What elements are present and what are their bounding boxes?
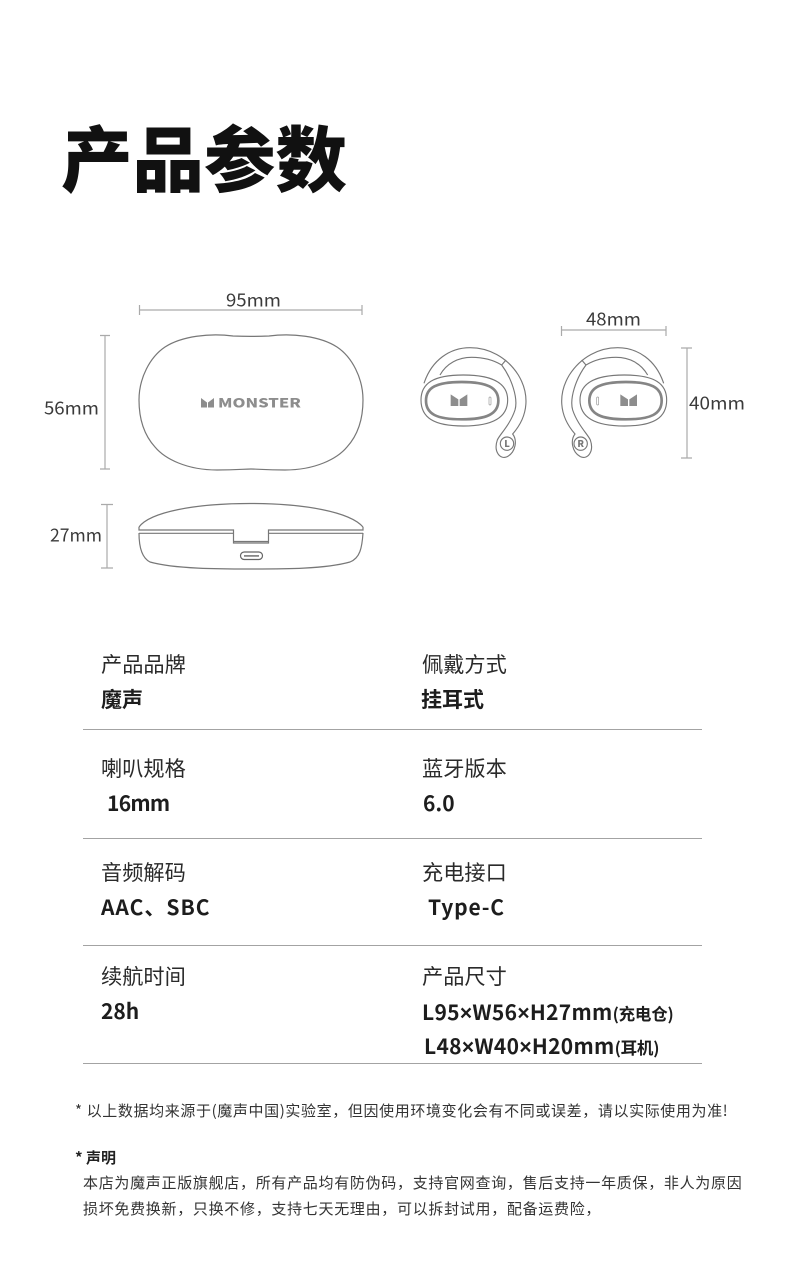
logo mark xyxy=(451,394,467,406)
earbud: right xyxy=(562,348,667,457)
case side view xyxy=(139,504,363,569)
dimension: 95mm: 95mm xyxy=(226,288,281,312)
spec: driver label: 喇叭规格 xyxy=(101,752,186,783)
spec: wearing label: 佩戴方式 xyxy=(422,648,507,679)
logo icon xyxy=(201,398,214,408)
logo wordmark: MONSTER xyxy=(218,392,301,412)
footnote: statement body xyxy=(83,1172,742,1219)
dimension diagrams xyxy=(44,288,745,570)
dimension: 40mm xyxy=(681,348,745,458)
dimension: 56mm xyxy=(44,336,110,469)
spec: codec label: 音频解码 xyxy=(101,856,186,887)
spec: battery value: 28h xyxy=(101,996,139,1026)
spec: wearing value: 挂耳式 xyxy=(421,684,484,714)
dimension: 27mm xyxy=(50,504,113,568)
dimension: 27mm: 27mm xyxy=(50,522,102,548)
dimension: 40mm: 40mm xyxy=(689,390,745,416)
spec: case size value: L95×W56×H27mm(充电仓) xyxy=(422,997,674,1027)
spec: driver value: 16mm xyxy=(107,788,169,818)
spec: codec value: AAC、SBC xyxy=(101,892,211,922)
spec: bluetooth value: 6.0 xyxy=(423,788,455,818)
dimension: 95mm xyxy=(140,288,362,315)
spec: earbud size value: L48×W40×H20mm(耳机) xyxy=(424,1031,659,1061)
charging port xyxy=(240,552,262,560)
case top view xyxy=(139,335,363,470)
dimension: 48mm: 48mm xyxy=(586,306,641,332)
R marker: R xyxy=(577,436,584,450)
title: 产品参数 xyxy=(61,103,347,207)
L marker: L xyxy=(504,436,510,450)
footnote: statement body: 损坏免费换新，只换不修，支持七天无理由，可以拆封试用，配备运费险， xyxy=(83,1198,601,1219)
dimension: 56mm: 56mm xyxy=(44,396,99,420)
footnote: statement body: 本店为魔声正版旗舰店，所有产品均有防伪码，支持官网查询，售后支持一年质保，非人为原因 xyxy=(83,1172,742,1193)
spec: charging label: 充电接口 xyxy=(422,856,507,887)
spec: charging value: Type-C xyxy=(428,892,505,922)
earbud: left xyxy=(421,348,526,457)
footnote: data source: * 以上数据均来源于(魔声中国)实验室，但因使用环境变化会有不同或误差，请以实际使用为准! xyxy=(75,1100,728,1121)
footnote: statement heading: * 声明 xyxy=(75,1147,116,1168)
spec: size label: 产品尺寸 xyxy=(422,960,507,991)
spec: bluetooth label: 蓝牙版本 xyxy=(422,752,507,783)
spec: brand value: 魔声 xyxy=(101,684,143,714)
spec: battery label: 续航时间 xyxy=(101,960,186,991)
dimension: 48mm xyxy=(562,306,666,336)
spec: brand label: 产品品牌 xyxy=(101,648,186,679)
